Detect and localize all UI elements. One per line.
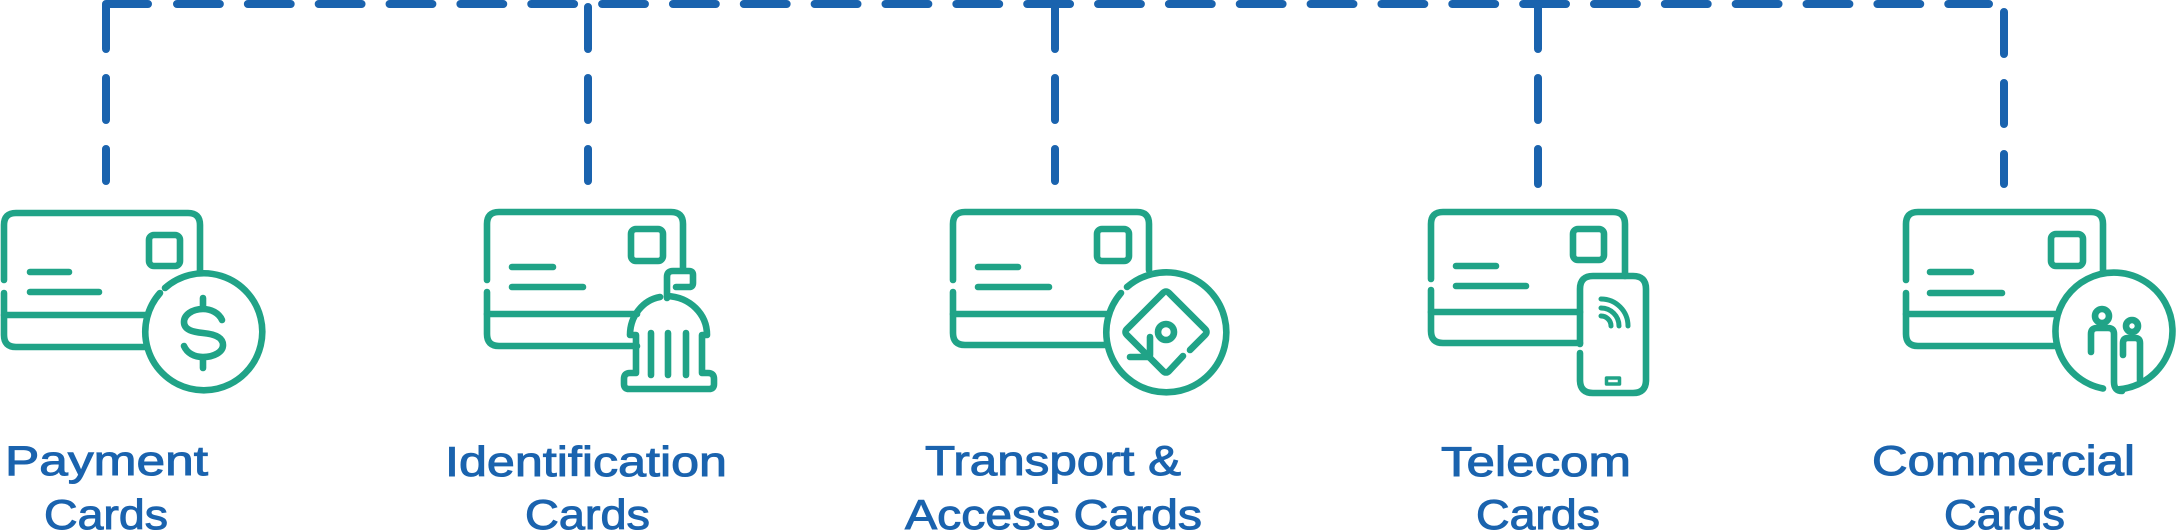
icon: card with government building — [487, 212, 714, 389]
label: payment cards — [5, 437, 208, 532]
panel: transport and access cards — [905, 212, 1226, 532]
label: payment cards: Payment — [5, 437, 208, 484]
icon: card with smartphone — [1431, 212, 1646, 393]
icon: card with dollar coin — [4, 213, 262, 390]
label: telecom cards: Telecom — [1441, 438, 1631, 485]
panel: payment cards — [4, 213, 262, 532]
label: identification cards: Identification — [445, 438, 727, 485]
icon: card with two people — [1906, 212, 2172, 391]
panel: telecom cards — [1431, 212, 1646, 532]
panel: commercial cards — [1872, 212, 2172, 532]
label: telecom cards — [1441, 438, 1631, 532]
panel: identification cards — [445, 212, 727, 532]
icon: card with transit ticket — [953, 212, 1226, 392]
label: commercial cards: Commercial — [1872, 437, 2135, 484]
label: commercial cards — [1872, 437, 2135, 532]
label: identification cards — [445, 438, 727, 532]
label: transport and access cards: Transport & — [925, 437, 1181, 484]
label: transport and access cards — [905, 437, 1202, 532]
dashed connector network — [106, 4, 2004, 184]
